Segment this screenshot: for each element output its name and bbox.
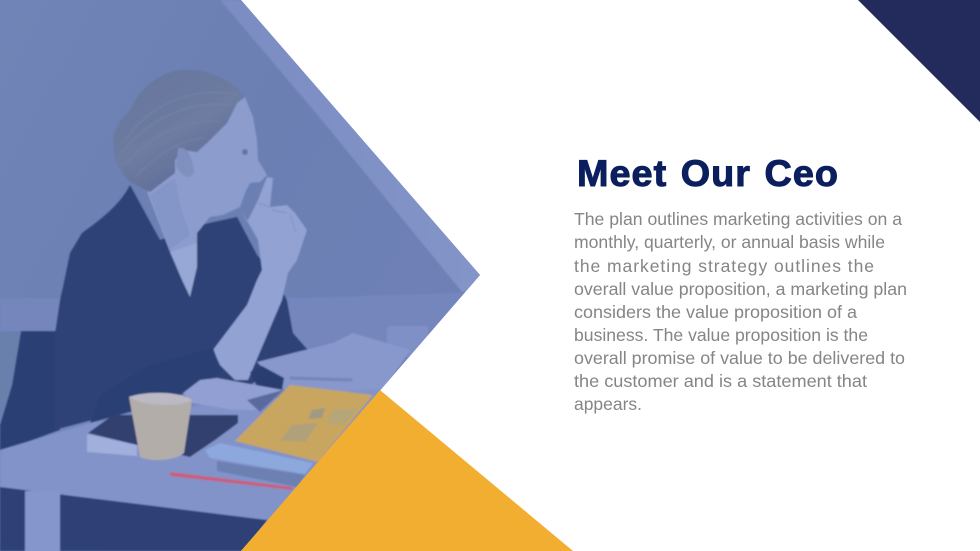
- stacked books: [205, 443, 313, 474]
- body paragraph: The plan outlines marketing activities on a: [574, 209, 902, 229]
- table leg: [25, 491, 60, 551]
- paper cup: [129, 393, 192, 460]
- back cup: [387, 326, 428, 356]
- red stripe: [170, 472, 293, 490]
- wall light band: [220, 0, 490, 292]
- under-desk dark: [0, 487, 267, 551]
- title: Meet Our Ceo: [577, 153, 839, 194]
- sleeve cuff: [90, 348, 222, 423]
- hand under papers: [250, 366, 284, 390]
- body paragraph: monthly, quarterly, or annual basis while: [574, 232, 885, 252]
- lower wall: [0, 293, 465, 450]
- face shading under jaw: [150, 178, 190, 250]
- navy corner triangle: [858, 0, 980, 122]
- photo panel: CEO at desk with blue duotone: [0, 0, 490, 551]
- body paragraph: overall promise of value to be delivered to: [574, 348, 905, 368]
- body paragraph: business. The value proposition is the: [574, 325, 868, 345]
- person: ear: [176, 148, 194, 177]
- table top: [0, 392, 378, 520]
- dark book and glasses: [88, 415, 238, 457]
- yellow folder: [235, 385, 373, 462]
- chair: [0, 331, 62, 452]
- cup rim: [129, 393, 192, 405]
- person: face and neck: [147, 97, 267, 252]
- body paragraph: appears.: [574, 394, 642, 414]
- finger shading: [258, 203, 296, 232]
- body paragraph: the customer and is a statement that: [574, 371, 867, 391]
- body paragraph: considers the value proposition of a: [574, 302, 857, 322]
- person: hair: [113, 70, 245, 192]
- hair streaks: [122, 92, 238, 178]
- body paragraph: the marketing strategy outlines the: [574, 256, 874, 276]
- yellow triangle: [241, 390, 573, 551]
- body paragraph: overall value proposition, a marketing plan: [574, 279, 907, 299]
- body paragraph: [574, 209, 907, 414]
- person: jacket: [55, 185, 308, 430]
- person: eye: [242, 149, 248, 155]
- papers: [257, 333, 410, 392]
- open book: [183, 378, 283, 410]
- person: hand and forearm: [213, 177, 307, 380]
- person: white shirt: [170, 242, 197, 297]
